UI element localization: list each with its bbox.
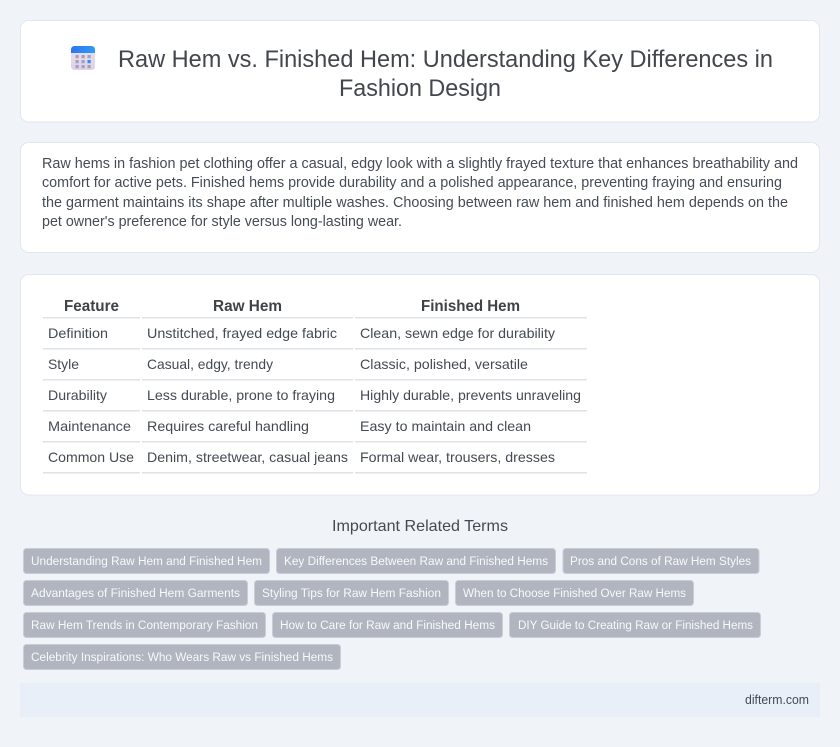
tag: When to Choose Finished Over Raw Hems xyxy=(463,586,686,600)
table header: Raw Hem xyxy=(213,298,282,315)
row: definition: Unstitched, frayed edge fabric xyxy=(147,325,337,341)
tag xyxy=(24,580,248,606)
row: style: Classic, polished, versatile xyxy=(360,356,528,372)
row: common use: Common Use xyxy=(48,449,134,465)
row: durability: Highly durable, prevents unraveling xyxy=(360,387,581,403)
row: maintenance: Requires careful handling xyxy=(147,418,309,434)
tag xyxy=(563,548,759,574)
tag xyxy=(24,612,266,638)
row: common use xyxy=(48,449,555,465)
text block: intro: comfort for active pets. Finished hems provide durability and a polished appearance, preventing fraying and ensuring xyxy=(42,175,782,191)
row: maintenance: Maintenance xyxy=(48,418,131,434)
row: common use: Denim, streetwear, casual jeans xyxy=(147,449,348,465)
row: durability: Durability xyxy=(48,387,107,403)
tag: Celebrity Inspirations: Who Wears Raw vs Finished Hems xyxy=(31,650,333,664)
tag xyxy=(510,612,760,638)
table header: Finished Hem xyxy=(421,298,520,315)
tag xyxy=(254,580,448,606)
row: definition: Clean, sewn edge for durability xyxy=(360,325,555,341)
table header: Feature xyxy=(64,298,119,315)
tag: Raw Hem Trends in Contemporary Fashion xyxy=(31,618,258,632)
tag: Advantages of Finished Hem Garments xyxy=(31,586,240,600)
title: Raw Hem vs. Finished Hem: Understanding Key Differences in xyxy=(118,46,773,73)
row: durability: Less durable, prone to fraying xyxy=(147,387,335,403)
tag xyxy=(276,548,556,574)
row: style: Casual, edgy, trendy xyxy=(147,356,273,372)
related term tags xyxy=(24,548,760,670)
row: definition xyxy=(48,325,555,341)
title xyxy=(118,46,773,102)
tag xyxy=(24,644,340,670)
tag: DIY Guide to Creating Raw or Finished Hems xyxy=(518,618,753,632)
tag: Key Differences Between Raw and Finished Hems xyxy=(284,554,548,568)
row: durability xyxy=(48,387,581,403)
row: maintenance: Easy to maintain and clean xyxy=(360,418,531,434)
tag: Pros and Cons of Raw Hem Styles xyxy=(570,554,751,568)
panel: comparison table xyxy=(20,274,820,495)
table header xyxy=(64,298,520,315)
title: Fashion Design xyxy=(339,75,501,102)
panel: header xyxy=(20,20,820,122)
tag xyxy=(24,548,270,574)
text block: intro: Raw hems in fashion pet clothing offer a casual, edgy look with a slightly frayed texture that enhances breathability and xyxy=(42,156,798,172)
row: maintenance xyxy=(48,418,531,434)
text block: intro: pet owner's preference for style versus long-lasting wear. xyxy=(42,214,402,230)
footer xyxy=(20,683,820,717)
text block: intro: the garment maintains its shape after multiple washes. Choosing between raw hem and finished hem depends on the xyxy=(42,195,788,211)
tag xyxy=(272,612,502,638)
row: style: Style xyxy=(48,356,79,372)
tag: How to Care for Raw and Finished Hems xyxy=(280,618,495,632)
row: common use: Formal wear, trousers, dresses xyxy=(360,449,555,465)
tag xyxy=(456,580,694,606)
row: definition: Definition xyxy=(48,325,108,341)
text block: intro xyxy=(42,156,798,230)
panel: intro paragraph xyxy=(20,142,820,252)
heading: important related terms: Important Related Terms xyxy=(332,518,508,535)
footer source label: difterm.com xyxy=(745,692,809,707)
tag: Understanding Raw Hem and Finished Hem xyxy=(31,554,262,568)
icon: calendar xyxy=(71,46,95,70)
tag: Styling Tips for Raw Hem Fashion xyxy=(262,586,441,600)
row: style xyxy=(48,356,528,372)
